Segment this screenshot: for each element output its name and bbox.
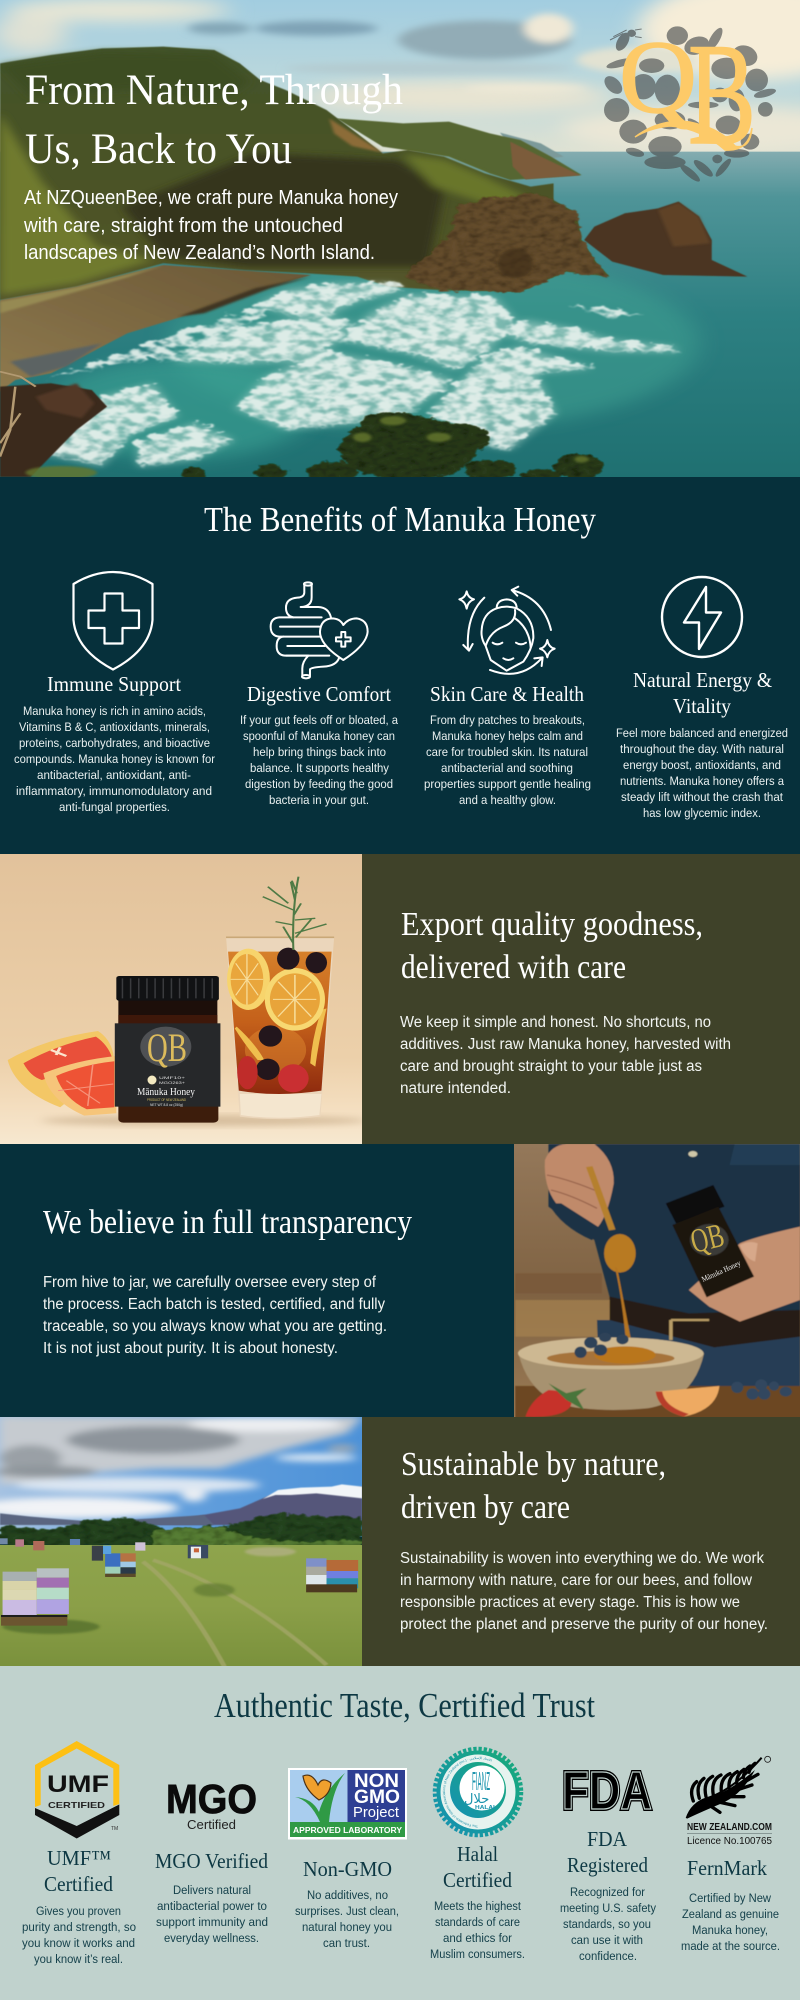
- certification text: MGO: antibacterial power to: [157, 1899, 267, 1913]
- icon: shield with cross: [74, 572, 152, 670]
- panel: transparency: [0, 1144, 800, 1419]
- export heading: delivered with care: [401, 949, 626, 986]
- certification: Non-GMO logo: Project: [353, 1804, 400, 1821]
- icon: lightning bolt in circle: [662, 577, 742, 657]
- certification text: UMF: [22, 1846, 136, 1966]
- certification text: Halal: standards of care: [435, 1915, 520, 1929]
- glass with drink: [226, 937, 334, 1119]
- beach: [0, 265, 311, 392]
- certification text: FDA: FDA: [587, 1827, 627, 1851]
- certifications heading: Authentic Taste, Certified Trust: [214, 1686, 595, 1725]
- spoon with honey: [589, 1167, 612, 1230]
- certification text: FDA: Registered: [567, 1853, 648, 1877]
- certification text: MGO: MGO Verified: [155, 1849, 268, 1873]
- certification text: FernMark: Zealand as genuine: [682, 1907, 779, 1921]
- panel: certifications: [0, 1666, 800, 2000]
- benefit: natural energy and vitality: Vitality: [673, 694, 731, 718]
- certification text: Non-GMO: surprises. Just clean,: [295, 1904, 399, 1918]
- table: [515, 1386, 800, 1419]
- certification: FDA logo: FDA: [562, 1761, 652, 1821]
- tilted jar: [666, 1185, 724, 1223]
- hero logo QB: [604, 26, 776, 182]
- benefit: immune support: compounds. Manuka honey is known for: [14, 752, 215, 766]
- benefit: natural energy and vitality: throughout the day. With natural: [620, 742, 784, 756]
- benefit: skin care and health: and a healthy glow.: [459, 793, 556, 807]
- surf foam: [41, 283, 679, 467]
- benefit: natural energy and vitality: has low glycemic index.: [643, 806, 761, 820]
- right hand: [689, 1227, 800, 1322]
- tree line: [0, 1513, 362, 1548]
- icon: bee: [610, 29, 642, 53]
- sea stack: [584, 202, 747, 277]
- benefit: natural energy and vitality: energy boost, antioxidants, and: [623, 758, 781, 772]
- sustainability body text: responsible practices at every stage. This is how we: [400, 1594, 740, 1611]
- blueberries on table: [731, 1379, 792, 1400]
- hero intro text: [23, 186, 399, 264]
- certification text: Halal: Certified: [443, 1868, 512, 1892]
- benefit: skin care and health: properties support gentle healing: [424, 777, 591, 791]
- logo letters: Q: [619, 20, 697, 135]
- certification: Non-GMO logo: APPROVED LABORATORY: [293, 1826, 403, 1835]
- benefit: natural energy and vitality: steady lift without the crash that: [621, 790, 784, 804]
- transparency body text: From hive to jar, we carefully oversee every step of: [43, 1274, 377, 1291]
- sustainability body text: Sustainability is woven into everything we do. We work: [400, 1550, 764, 1567]
- certification: Non-GMO logo: GMO: [354, 1787, 400, 1808]
- clouds: [0, 1417, 362, 1518]
- transparency body text: [43, 1274, 387, 1357]
- certification text: FernMark: made at the source.: [681, 1939, 780, 1953]
- hive group centre: [92, 1546, 136, 1577]
- bowl: [518, 1353, 704, 1410]
- benefit: immune support: [14, 672, 215, 814]
- export body text: additives. Just raw Manuka honey, harvested with: [400, 1036, 731, 1053]
- distant headlands: [337, 118, 582, 180]
- certification: MGO logo: Certified: [187, 1817, 236, 1832]
- certification text: Non-GMO: [295, 1857, 399, 1950]
- panel: benefits: [0, 477, 800, 854]
- benefit: immune support: Manuka honey is rich in amino acids,: [23, 704, 206, 718]
- benefit: skin care and health: Skin Care & Health: [430, 682, 584, 706]
- certification text: FernMark: FernMark: [687, 1856, 767, 1880]
- benefit: digestive comfort: bacteria in your gut.: [269, 793, 369, 807]
- benefit: skin care and health: [424, 682, 591, 807]
- benefit: immune support: proteins, carbohydrates, and bioactive: [19, 736, 210, 750]
- peach slice: [656, 1386, 719, 1417]
- text panel: sustainability: [362, 1417, 800, 1666]
- benefit: immune support: anti-fungal properties.: [59, 800, 170, 814]
- certification: UMF logo: UMF: [47, 1771, 109, 1798]
- jar label text: Mānuka Honey: [137, 1087, 195, 1098]
- certification text: MGO: support immunity and: [156, 1915, 268, 1929]
- benefit: natural energy and vitality: Natural Energy &: [633, 668, 772, 692]
- benefit: skin care and health: Manuka honey helps calm and: [432, 729, 583, 743]
- export body text: care and brought straight to your table just as: [400, 1058, 702, 1075]
- sea: [0, 152, 800, 478]
- sustainability heading: driven by care: [401, 1489, 570, 1526]
- certification: UMF logo: TM: [111, 1826, 118, 1832]
- strawberry: [526, 1390, 572, 1417]
- benefit: natural energy and vitality: [616, 668, 788, 820]
- certification: FDA logo: FDA: [562, 1761, 652, 1821]
- certification: UMF logo: CERTIFIED: [48, 1800, 105, 1810]
- hero intro text: landscapes of New Zealand’s North Island.: [24, 241, 375, 264]
- certification text: MGO: [155, 1849, 268, 1945]
- surf underlay: [41, 283, 679, 467]
- certification text: UMF: Certified: [44, 1872, 113, 1896]
- certification text: UMF: Gives you proven: [36, 1904, 121, 1918]
- benefit: digestive comfort: help bring things back into: [253, 745, 386, 759]
- jeans and belt: [597, 1320, 800, 1387]
- sustainability heading: Sustainable by nature,: [401, 1446, 666, 1483]
- benefit: immune support: Vitamins B & C, antioxidants, minerals,: [19, 720, 210, 734]
- certification: FernMark logo: [687, 1756, 772, 1847]
- benefit: natural energy and vitality: Feel more balanced and energized: [616, 726, 788, 740]
- certification text: FernMark: [681, 1856, 780, 1953]
- export heading: [401, 906, 703, 986]
- distant hives: [0, 1538, 208, 1558]
- hero intro text: with care, straight from the untouched: [23, 214, 343, 237]
- icon: face with sparkles: [459, 587, 555, 674]
- certification text: FernMark: Certified by New: [689, 1891, 771, 1905]
- benefits heading: The Benefits of Manuka Honey: [204, 500, 596, 539]
- cliff face: [403, 193, 610, 292]
- certification: Halal seal: FIANZ: [472, 1766, 490, 1796]
- benefit: digestive comfort: digestion by feeding the good: [245, 777, 393, 791]
- certification text: Halal: Muslim consumers.: [430, 1947, 525, 1961]
- certification text: Non-GMO: natural honey you: [302, 1920, 392, 1934]
- jar label text: MGO263+: [159, 1080, 186, 1085]
- hive group right: [306, 1558, 358, 1592]
- benefit: skin care and health: care for troubled skin. Its natural: [426, 745, 588, 759]
- hero title: [25, 67, 403, 173]
- export body text: nature intended.: [400, 1080, 511, 1097]
- jar label text: QB: [147, 1025, 187, 1070]
- certification: FernMark logo: Licence No.100765: [687, 1836, 772, 1847]
- certification text: FDA: Recognized for: [570, 1885, 645, 1899]
- hero intro text: At NZQueenBee, we craft pure Manuka honey: [24, 186, 399, 209]
- certification text: FDA: meeting U.S. safety: [560, 1901, 657, 1915]
- transparency body text: traceable, so you always know what you are getting.: [43, 1318, 387, 1335]
- certification text: UMF: purity and strength, so: [22, 1920, 136, 1934]
- certification text: Non-GMO: Non-GMO: [303, 1857, 392, 1881]
- sustainability body text: [400, 1550, 768, 1633]
- jar text: [692, 1225, 740, 1282]
- sustainability heading: [401, 1446, 666, 1526]
- transparency heading: We believe in full transparency: [43, 1204, 412, 1241]
- certification text: UMF: you know it works and: [22, 1936, 135, 1950]
- certification text: MGO: Delivers natural: [173, 1883, 251, 1897]
- certification text: Halal: Halal: [457, 1842, 498, 1866]
- certification text: UMF: UMF™: [47, 1846, 111, 1870]
- benefit: digestive comfort: [240, 682, 398, 807]
- hero landscape photo: [0, 0, 800, 482]
- certification: Halal seal: حلال: [464, 1792, 489, 1807]
- certification: Halal seal: HALAL: [475, 1805, 498, 1811]
- export body text: We keep it simple and honest. No shortcuts, no: [400, 1014, 711, 1031]
- certification: UMF logo: [35, 1741, 119, 1838]
- certification: FernMark logo: NEW ZEALAND.COM: [687, 1821, 772, 1833]
- photo: beehives in meadow: [0, 1417, 362, 1667]
- main headland: [0, 47, 610, 300]
- hive group left: [1, 1568, 69, 1626]
- certification text: Halal: Meets the highest: [434, 1899, 522, 1913]
- benefit: natural energy and vitality: nutrients. Manuka honey offers a: [620, 774, 784, 788]
- transparency body text: It is not just about purity. It is about honesty.: [43, 1340, 338, 1357]
- sustainability body text: in harmony with nature, care for our bees, and follow: [400, 1572, 753, 1589]
- rosemary sprig: [263, 877, 327, 950]
- certification text: FDA: [560, 1827, 657, 1963]
- benefit: skin care and health: antibacterial and soothing: [441, 761, 573, 775]
- honey jar: [115, 976, 220, 1123]
- jar label text: PRODUCT OF NEW ZEALAND: [147, 1098, 186, 1102]
- hero title: Us, Back to You: [25, 126, 292, 173]
- export body text: [400, 1014, 731, 1097]
- mountain: [153, 1487, 362, 1525]
- icon: intestine with heart: [271, 582, 368, 678]
- certification: Non-GMO logo: [288, 1768, 407, 1840]
- shirt: [548, 1144, 800, 1314]
- certification text: FDA: can use it with: [571, 1933, 643, 1947]
- jar label text: [137, 1034, 195, 1107]
- certification text: FDA: standards, so you: [563, 1917, 651, 1931]
- hero title: From Nature, Through: [25, 67, 403, 114]
- hero section: [0, 0, 800, 482]
- certification text: Non-GMO: No additives, no: [307, 1888, 388, 1902]
- photo: honey drizzled over bowl: [514, 1144, 800, 1419]
- logo letters: [622, 42, 753, 151]
- product photo: jar and iced drink: [0, 854, 367, 1144]
- certification text: UMF: you know it’s real.: [34, 1952, 123, 1966]
- icon: floral medallion: [601, 26, 777, 184]
- left hand: [545, 1144, 614, 1231]
- export heading: Export quality goodness,: [401, 906, 703, 943]
- transparency body text: the process. Each batch is tested, certified, and fully: [43, 1296, 385, 1313]
- certification: Halal seal: [432, 1746, 524, 1838]
- benefit: digestive comfort: balance. It supports healthy: [250, 761, 390, 775]
- certification text: Halal: [430, 1842, 525, 1961]
- jar text: Mānuka Honey: [700, 1259, 742, 1284]
- certification: MGO logo: MGO: [166, 1776, 257, 1822]
- certification text: MGO: everyday wellness.: [164, 1931, 259, 1945]
- foreground rocks: [0, 383, 107, 477]
- grapefruit wedges: [8, 1031, 116, 1116]
- certification: Non-GMO logo: NON: [354, 1771, 399, 1792]
- jar label text: UMF10+: [159, 1075, 186, 1080]
- benefit: digestive comfort: spoonful of Manuka honey can: [243, 729, 395, 743]
- foreground trees: [182, 412, 604, 482]
- jar text: QB: [687, 1217, 728, 1261]
- text panel: transparency: [0, 1144, 514, 1417]
- certification text: FDA: confidence.: [579, 1949, 637, 1963]
- certification text: FernMark: Manuka honey,: [692, 1923, 768, 1937]
- logo letters: B: [688, 13, 756, 175]
- benefit: immune support: antibacterial, antioxidant, anti-: [37, 768, 191, 782]
- jar label text: NET WT 8.8 oz (250g): [150, 1103, 183, 1107]
- panel: export quality: [0, 854, 800, 1144]
- benefit: digestive comfort: If your gut feels off or bloated, a: [240, 713, 398, 727]
- benefit: digestive comfort: Digestive Comfort: [247, 682, 391, 706]
- benefit: immune support: inflammatory, immunomodulatory and: [16, 784, 212, 798]
- meadow: [0, 1545, 362, 1667]
- panel: sustainability: [0, 1417, 800, 1667]
- certification text: Halal: and ethics for: [443, 1931, 512, 1945]
- benefit: immune support: Immune Support: [47, 672, 181, 696]
- certification: Halal seal: The Federation of Islamic Associations of New Zealand (Inc.) · الاتحاد الإسلامي: [442, 1756, 492, 1828]
- text panel: export quality: [362, 854, 800, 1144]
- certification text: Non-GMO: can trust.: [323, 1936, 370, 1950]
- sustainability body text: protect the planet and preserve the purity of our honey.: [400, 1616, 768, 1633]
- benefit: skin care and health: From dry patches to breakouts,: [430, 713, 585, 727]
